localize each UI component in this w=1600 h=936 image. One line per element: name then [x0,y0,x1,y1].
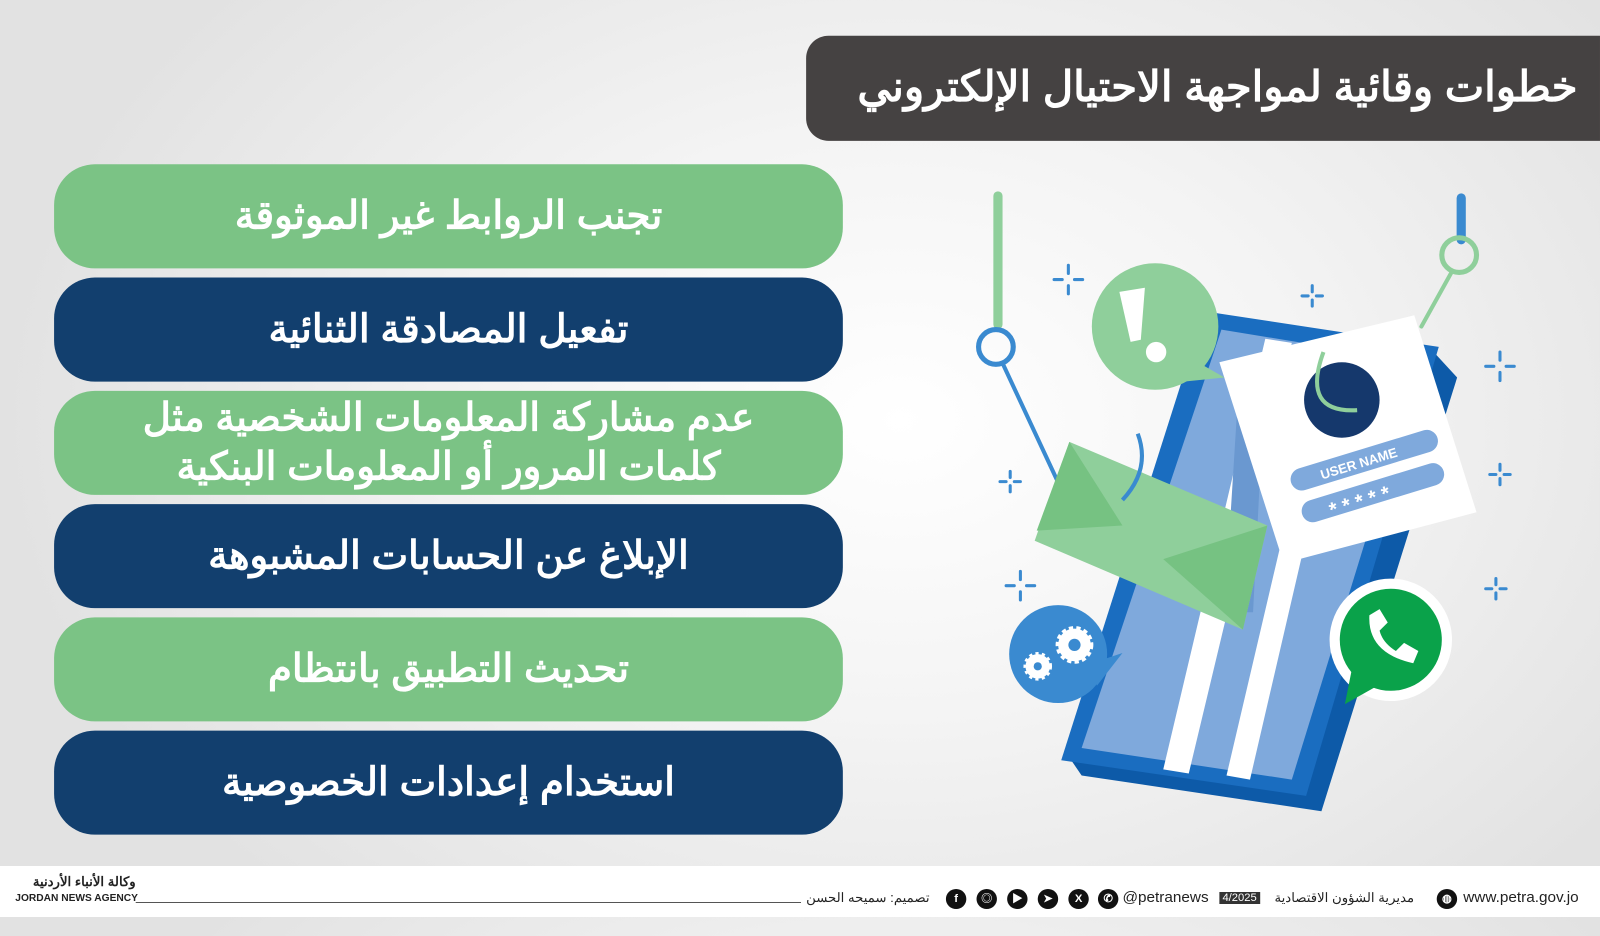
pill: two-factor authentication [54,278,843,382]
pill: do not share personal info: كلمات المرور أو المعلومات البنكية [176,446,720,489]
title: خطوات وقائية لمواجهة الاحتيال الإلكتروني [857,63,1578,110]
footer [0,866,1600,917]
login card [1219,315,1477,563]
pill: use privacy settings: استخدام إعدادات الخصوصية [222,761,675,804]
pill: report suspicious accounts [54,504,843,608]
social icons [946,889,966,909]
footer: ◎ [981,893,992,905]
footer: ➤ [1043,893,1053,905]
sparkles [1000,265,1514,600]
envelope [1035,434,1267,630]
alert bubble [1092,263,1224,390]
footer: ✆ [1103,893,1113,905]
pill: update app regularly [54,617,843,721]
title [806,36,1600,141]
pill: two-factor authentication: تفعيل المصادقة الثنائية [269,308,628,351]
pill: update app regularly: تحديث التطبيق بانتظام [268,648,629,691]
footer: ◍ [1442,893,1452,905]
footer: X [1075,893,1082,905]
agency logo text: وكالة الأنباء الأردنية [33,874,136,889]
footer: JORDAN NEWS AGENCY [15,893,138,904]
footer: @petranews [1122,889,1209,906]
footer: 4/2025 [1222,892,1257,904]
footer: مديرية الشؤون الاقتصادية [1274,890,1414,905]
social icons: f [954,893,958,905]
hooks [979,196,1477,500]
pill: report suspicious accounts: الإبلاغ عن الحسابات المشبوهة [208,535,689,578]
login card: USER NAME [1319,445,1399,482]
phone [1061,311,1457,811]
footer: www.petra.gov.jo [1463,889,1579,906]
gear bubble [1009,605,1122,703]
pill: use privacy settings [54,731,843,835]
pill: do not share personal info [54,391,843,495]
pill: avoid untrusted links [54,164,843,268]
footer: ▶ [1012,893,1023,905]
login card: * * * * * [1327,483,1393,522]
pill: avoid untrusted links: تجنب الروابط غير الموثوقة [235,195,662,238]
credits: تصميم: سميحه الحسن [806,890,930,905]
whatsapp icon [1330,579,1452,704]
pill: do not share personal info: عدم مشاركة المعلومات الشخصية مثل [143,397,754,440]
